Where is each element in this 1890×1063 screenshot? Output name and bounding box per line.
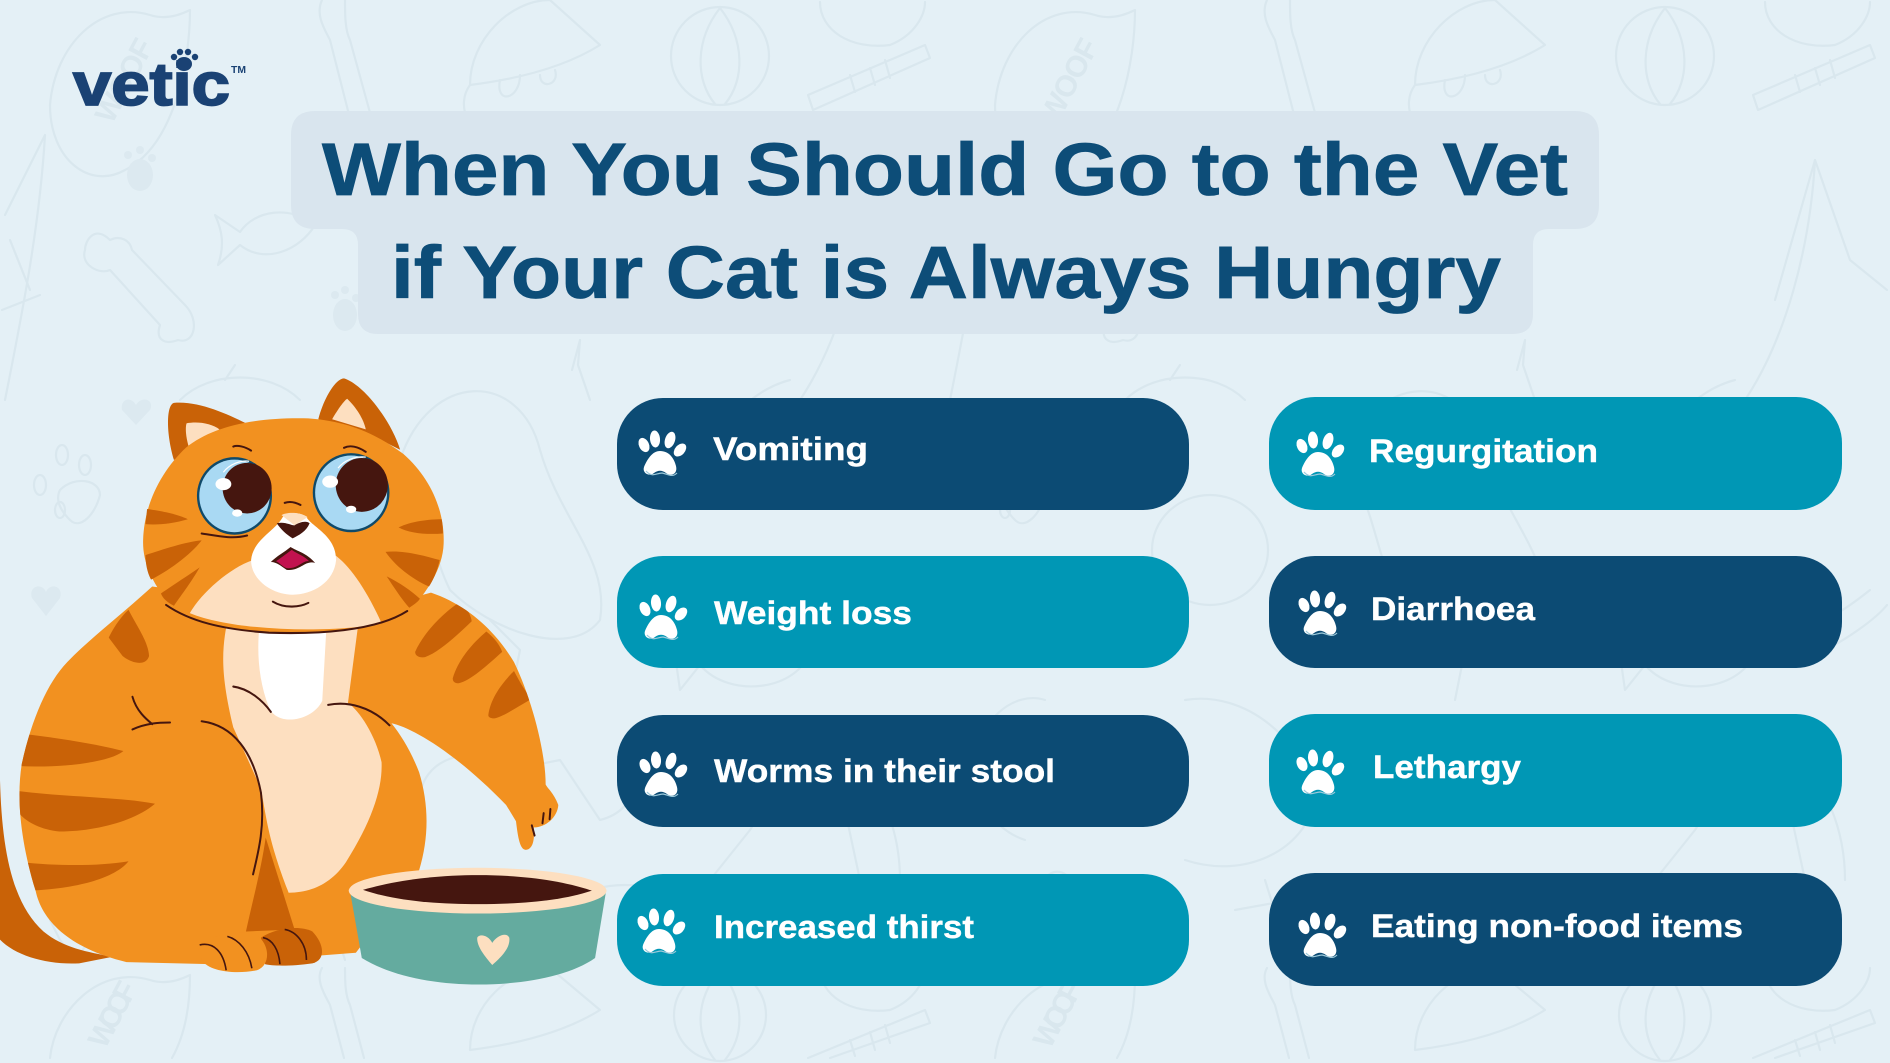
left ear	[168, 403, 246, 460]
label: Worms in their stool	[714, 753, 1055, 789]
pill: Weight loss	[617, 556, 1189, 668]
pill: Vomiting	[617, 398, 1189, 510]
pill: Worms in their stool	[617, 715, 1189, 827]
head	[143, 418, 444, 633]
pill: Lethargy	[1269, 714, 1842, 827]
head stripes	[146, 509, 443, 608]
chest	[223, 627, 382, 893]
chin lines	[166, 446, 407, 633]
title line 1: When You Should Go to the Vet	[322, 128, 1568, 211]
pill: Regurgitation	[1269, 397, 1842, 510]
logo: vetic: vetic	[73, 51, 230, 118]
back leg shadow	[246, 838, 295, 931]
title line 2: if Your Cat is Always Hungry	[391, 231, 1501, 314]
label: Diarrhoea	[1371, 591, 1535, 627]
icon: paw	[637, 751, 690, 796]
chest bib	[258, 631, 326, 720]
cat body	[19, 587, 558, 964]
icon: paw	[636, 430, 689, 475]
icon: paw	[1294, 431, 1347, 476]
label: Eating non-food items	[1371, 908, 1743, 944]
illustration: orange cat with bowl	[0, 378, 607, 985]
label: Increased thirst	[714, 909, 974, 945]
nose	[277, 522, 310, 538]
label: Vomiting	[713, 431, 868, 467]
food bowl	[349, 868, 607, 985]
face cream	[190, 556, 382, 629]
right ear	[318, 378, 400, 450]
body stripes	[16, 603, 532, 891]
title background	[291, 111, 1599, 334]
icon: paw	[635, 908, 688, 953]
right eye	[313, 453, 389, 532]
icon: paw	[1296, 912, 1349, 957]
pill: Diarrhoea	[1269, 556, 1842, 668]
pill: Increased thirst	[617, 874, 1189, 986]
front paws	[198, 928, 322, 972]
label: Weight loss	[714, 595, 912, 631]
title	[291, 111, 1599, 334]
pill: Eating non-food items	[1269, 873, 1842, 986]
trademark: TM	[231, 65, 246, 76]
mouth	[271, 547, 315, 570]
muzzle	[251, 513, 336, 595]
tail	[0, 780, 113, 964]
left eye	[197, 457, 272, 535]
label: Lethargy	[1373, 749, 1521, 785]
icon: paw	[1296, 590, 1349, 635]
icon: paw	[637, 594, 690, 639]
body crease lines	[132, 687, 550, 874]
icon: paw	[1294, 749, 1347, 794]
label: Regurgitation	[1369, 433, 1598, 469]
icon: bowl heart	[477, 935, 509, 965]
icon: logo paw	[171, 49, 198, 71]
